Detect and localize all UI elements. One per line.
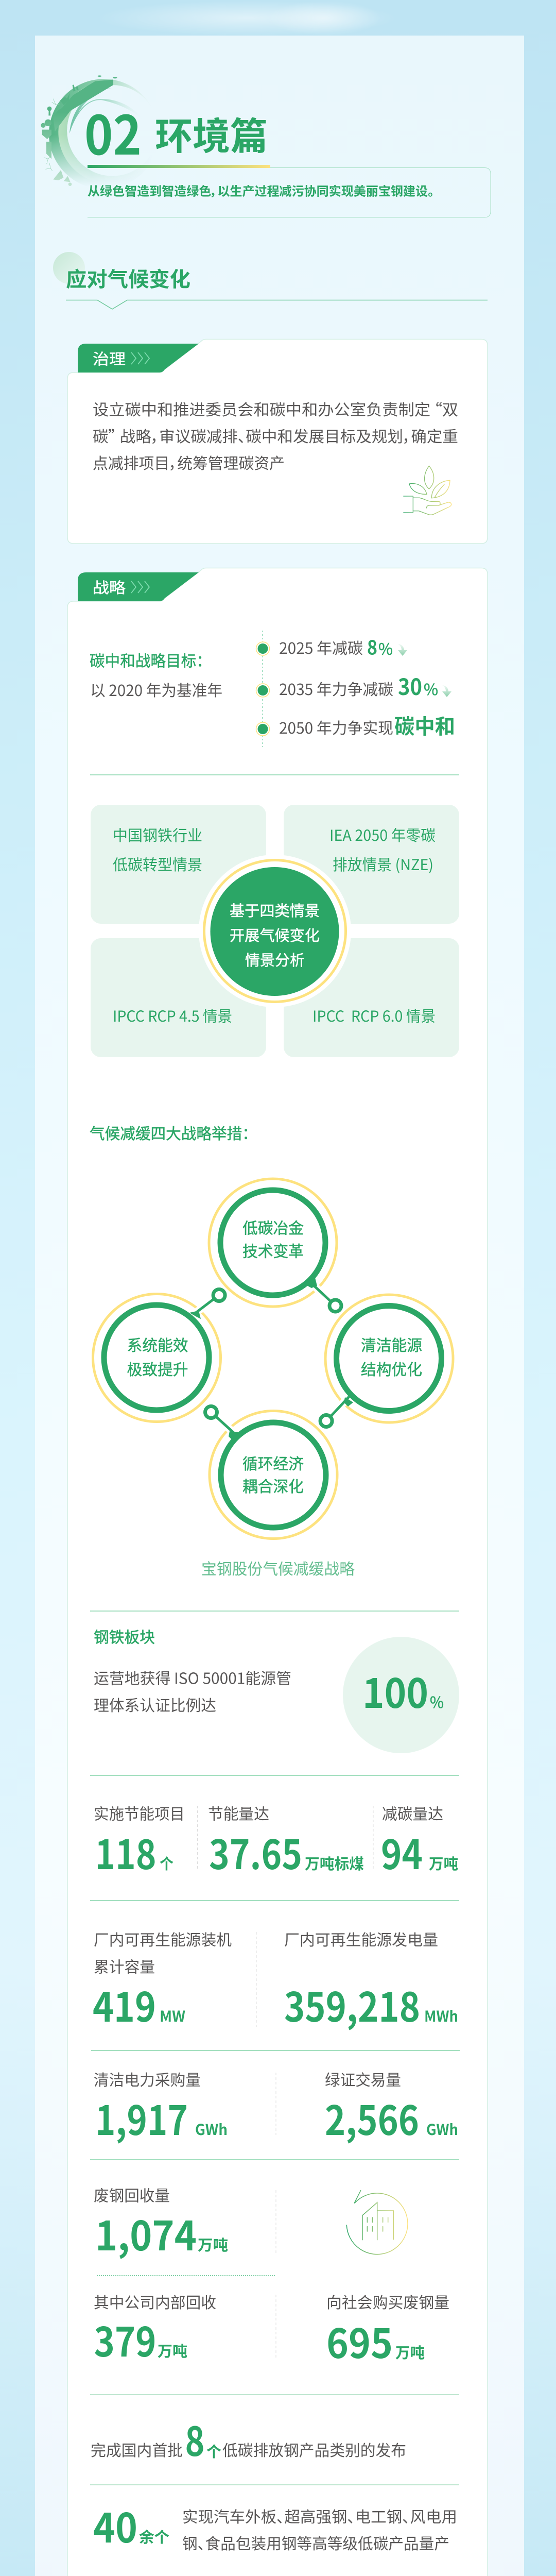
stat: renewable capacity: 累计容量 (94, 1955, 155, 1977)
stat: clean power purchase: 清洁电力采购量 (94, 2067, 201, 2090)
chapter name: 环境篇 (155, 106, 268, 161)
circle: circular economy: 耦合深化 (242, 1474, 304, 1497)
gradient underline (88, 165, 270, 168)
diagram caption: 宝钢股份气候减缓战略 (201, 1556, 355, 1579)
governance tab (78, 344, 199, 372)
stat: renewable capacity: MW (160, 2005, 185, 2026)
heading blob (53, 252, 85, 284)
circle: circular economy: 循环经济 (242, 1451, 304, 1474)
stat: 40+ high-grade products: 实现汽车外板、超高强钢、电工钢、风电用 (182, 2504, 457, 2527)
subtitle text: 从绿色智造到智造绿色，以生产过程减污协同实现美丽宝钢建设。 (88, 181, 434, 199)
header: chapter title (41, 75, 270, 189)
circle: clean energy (320, 1295, 453, 1427)
stat: energy saving projects: 118 (95, 1823, 157, 1881)
scenario: China steel: 中国钢铁行业 (113, 824, 202, 845)
target 2025: 8 (367, 632, 377, 660)
stat: internal recycling: 其中公司内部回收 (94, 2290, 216, 2313)
circular strategy diagram (93, 1179, 453, 1538)
stat: 8 low-carbon product categories (91, 2410, 406, 2468)
stat: energy saving projects: 个 (160, 1852, 173, 1874)
stat: green certificates: GWh (426, 2118, 458, 2140)
governance body text: 碳” 战略，审议碳减排、碳中和发展目标及规划，确定重 (93, 424, 458, 447)
circle: low-carbon metallurgy: 技术变革 (242, 1239, 304, 1261)
stat: carbon reduced (381, 1801, 458, 1881)
circle: system efficiency (93, 1289, 225, 1422)
stat: renewable capacity (93, 1927, 232, 2033)
circle: system efficiency: 系统能效 (127, 1333, 188, 1355)
section heading: climate response (53, 252, 488, 309)
stat: internal recycling: 379 (94, 2311, 157, 2368)
stat: 8 low-carbon product categories: 个 (206, 2440, 221, 2462)
city and nature silhouette (41, 75, 117, 186)
panel: strategy card (67, 568, 488, 2576)
target 2050: 碳中和 (394, 710, 455, 740)
stat: 40+ high-grade products: 40 (93, 2497, 137, 2554)
watercolor sky texture (98, 1, 396, 36)
steel segment ISO stat (94, 1624, 459, 1753)
stat: purchased scrap: 万吨 (395, 2341, 425, 2363)
stat: scrap recycling: 1,074 (95, 2205, 197, 2262)
stat: 40+ high-grade products (93, 2497, 457, 2554)
target 2050 (256, 710, 455, 740)
stat: scrap recycling (94, 2183, 228, 2262)
circle: clean energy: 清洁能源 (361, 1333, 422, 1355)
stat: renewable generation (284, 1927, 458, 2033)
target 2025 (256, 632, 407, 660)
carbon neutrality goal label (90, 648, 222, 701)
stat: scrap recycling: 废钢回收量 (94, 2183, 170, 2206)
circle: low-carbon metallurgy: 低碳冶金 (242, 1216, 304, 1239)
strategy tab (78, 572, 199, 601)
steel segment ISO stat: 钢铁板块 (94, 1624, 155, 1647)
stat: carbon reduced: 94 (381, 1823, 423, 1881)
stat: internal recycling (94, 2290, 216, 2368)
target 2035: 2035 年力争减碳 (279, 677, 393, 700)
stat: 40+ high-grade products: 钢、食品包装用钢等高等级低碳产品量产 (182, 2531, 449, 2554)
circle: system efficiency: 极致提升 (127, 1357, 188, 1380)
stat: green certificates: 2,566 (325, 2089, 419, 2147)
stat: 8 low-carbon product categories: 8 (185, 2410, 205, 2468)
stat: clean power purchase: 1,917 (95, 2089, 188, 2147)
subtitle box (88, 168, 491, 217)
stat: renewable generation: 厂内可再生能源发电量 (284, 1927, 438, 1950)
stat: carbon reduced: 减碳量达 (382, 1801, 443, 1824)
stat: energy saved (208, 1801, 364, 1881)
chapter number: 02 (84, 92, 142, 170)
stat: purchased scrap (326, 2290, 449, 2370)
stat: 8 low-carbon product categories: 低碳排放钢产品类别的发布 (222, 2438, 406, 2461)
stat: purchased scrap: 695 (326, 2312, 393, 2370)
center circle: 基于四类情景 (230, 899, 320, 921)
stat: internal recycling: 万吨 (158, 2340, 187, 2361)
100% circle: 100 (362, 1662, 428, 1720)
governance tab: 治理 (93, 347, 126, 369)
100% circle: % (430, 1690, 444, 1713)
stat: carbon reduced: 万吨 (429, 1852, 458, 1874)
stat: purchased scrap: 向社会购买废钢量 (326, 2290, 449, 2313)
scenario: IEA NZE (284, 805, 459, 924)
steel segment ISO stat: 理体系认证比例达 (94, 1693, 216, 1716)
stat: energy saved: 节能量达 (208, 1801, 269, 1824)
panel: governance card (67, 339, 488, 544)
governance body text: 点减排项目，统筹管理碳资产 (93, 451, 285, 473)
scenario: RCP 6.0: IPCC RCP 6.0 情景 (312, 1005, 436, 1026)
timeline: carbon targets (256, 631, 455, 747)
scenario: RCP 4.5: IPCC RCP 4.5 情景 (113, 1005, 232, 1026)
target 2050: 2050 年力争实现 (279, 716, 393, 738)
stat: renewable capacity: 419 (93, 1976, 156, 2033)
stat: green certificates: 绿证交易量 (325, 2067, 401, 2090)
scenario: RCP 4.5 (91, 938, 266, 1057)
scenario diagram (91, 805, 459, 1057)
heading notch line (66, 300, 488, 309)
scenario: IEA NZE: 排放情景 (NZE) (333, 853, 433, 875)
stat: scrap recycling: 万吨 (198, 2233, 228, 2255)
circle: clean energy: 结构优化 (361, 1357, 422, 1380)
steel segment ISO stat: 运营地获得 ISO 50001能源管 (94, 1666, 291, 1688)
circle: low-carbon metallurgy (209, 1179, 341, 1312)
stat: 8 low-carbon product categories: 完成国内首批 (91, 2438, 183, 2461)
carbon neutrality goal label: 碳中和战略目标： (90, 648, 204, 671)
stat: green certificates (325, 2067, 458, 2147)
globe ring graphic (41, 75, 143, 186)
four measures heading: 气候减缓四大战略举措： (90, 1121, 250, 1144)
governance body text: 设立碳中和推进委员会和碳中和办公室负责制定 “双 (93, 397, 458, 420)
stat: 40+ high-grade products: 余个 (139, 2526, 169, 2547)
carbon neutrality goal label: 以 2020 年为基准年 (90, 678, 222, 701)
icon: plant in hand (403, 466, 451, 515)
stat: energy saved: 37.65 (209, 1823, 302, 1881)
stat: energy saving projects (94, 1801, 185, 1881)
governance body text (93, 397, 458, 473)
stat: energy saved: 万吨标煤 (305, 1852, 364, 1874)
target 2025: % (378, 637, 393, 659)
target 2035 (256, 669, 451, 702)
scenario: China steel: 低碳转型情景 (113, 853, 202, 875)
center circle: 开展气候变化 (230, 924, 320, 945)
stat: clean power purchase (94, 2067, 228, 2147)
stat: renewable generation: MWh (424, 2005, 458, 2026)
stat: clean power purchase: GWh (195, 2118, 228, 2140)
target 2025: 2025 年减碳 (279, 636, 363, 658)
center circle (199, 855, 351, 1007)
circle: circular economy (205, 1406, 337, 1538)
heading text: 应对气候变化 (66, 263, 190, 293)
stat: renewable capacity: 厂内可再生能源装机 (94, 1927, 232, 1950)
stat: energy saving projects: 实施节能项目 (94, 1801, 185, 1824)
strategy tab: 战略 (93, 576, 126, 598)
center circle: 情景分析 (245, 948, 305, 970)
scenario: RCP 6.0 (284, 938, 459, 1057)
100% circle (343, 1637, 459, 1753)
scenario: China steel (91, 805, 266, 924)
icon: recycling building (346, 2191, 408, 2255)
target 2035: % (424, 677, 438, 700)
stat: renewable generation: 359,218 (284, 1976, 420, 2033)
scenario: IEA NZE: IEA 2050 年零碳 (329, 824, 436, 845)
target 2035: 30 (398, 669, 422, 702)
